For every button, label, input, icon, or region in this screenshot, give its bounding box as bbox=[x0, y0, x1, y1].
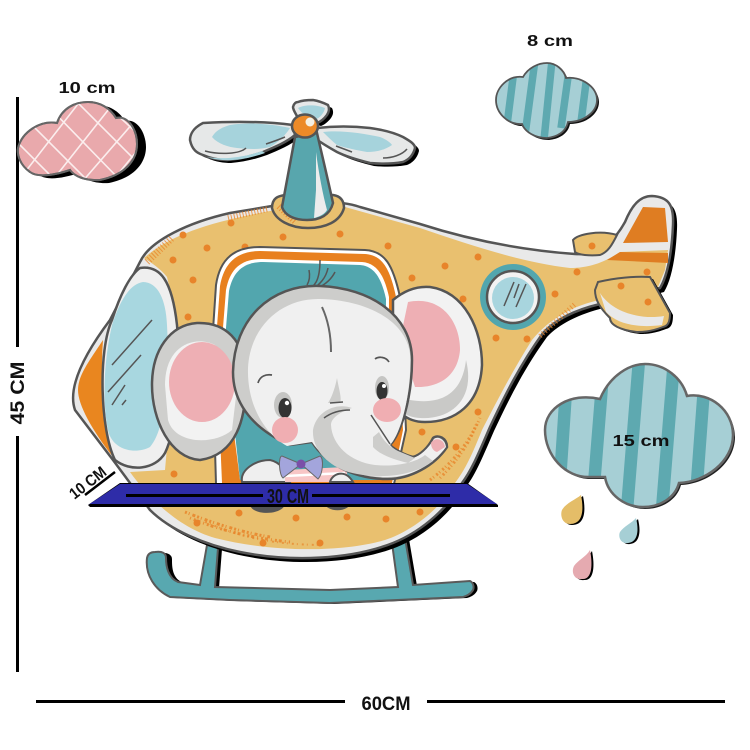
shelf dimension line: 30 CM: 30 CM bbox=[267, 486, 309, 508]
lower tail fin bbox=[595, 277, 673, 334]
forehead crease bbox=[322, 307, 331, 352]
blades bbox=[190, 100, 415, 164]
shelf depth dimension: 10 CM: 10 CM bbox=[66, 464, 110, 503]
cloud: teal 15 cm bbox=[545, 360, 735, 510]
upper tail fin bbox=[573, 233, 617, 255]
face bbox=[248, 299, 446, 477]
trunk lines bbox=[324, 402, 390, 444]
cloud: teal 8 cm bbox=[496, 33, 599, 140]
helicopter skids bbox=[147, 538, 478, 604]
bow tie bbox=[279, 456, 322, 479]
propeller shadow bbox=[194, 103, 419, 167]
label: 10 cm: 10 cm bbox=[58, 80, 116, 97]
dimension: width 60CM bbox=[36, 694, 725, 715]
collar bbox=[272, 195, 344, 228]
body outline bbox=[73, 196, 673, 558]
front windshield frame bbox=[103, 268, 179, 468]
right eye bbox=[375, 376, 389, 400]
orange speckle texture bbox=[147, 209, 575, 545]
trunk tip bbox=[431, 439, 445, 452]
raindrops bbox=[561, 495, 639, 580]
trunk shading bbox=[313, 406, 433, 476]
orange polka dots bbox=[170, 220, 652, 546]
hair tuft bbox=[305, 260, 335, 290]
side cabin window bbox=[212, 247, 406, 484]
cloud: pink 10 cm bbox=[16, 82, 146, 184]
yellow fuselage bbox=[130, 207, 668, 549]
body shadow bbox=[77, 200, 677, 562]
tail orange bbox=[607, 207, 668, 263]
paws and shirt bbox=[242, 460, 353, 482]
shelf dimension line: 30 CM bbox=[126, 486, 450, 508]
blue shelf bbox=[88, 483, 498, 508]
dimension: width 60CM: 60CM bbox=[362, 694, 410, 715]
left eye bbox=[274, 392, 292, 418]
elephant pilot bbox=[152, 260, 482, 513]
left ear bbox=[152, 323, 245, 460]
dimension: height 45 CM: 45 CM bbox=[8, 362, 29, 424]
porthole bbox=[480, 264, 546, 330]
feet under shelf bbox=[250, 505, 350, 513]
mast bbox=[282, 133, 333, 220]
cheeks bbox=[272, 417, 298, 443]
brows bbox=[258, 357, 389, 383]
dimension: height 45 CM bbox=[8, 97, 29, 672]
head bbox=[233, 286, 447, 479]
label: 15 cm: 15 cm bbox=[612, 433, 670, 450]
label: 8 cm: 8 cm bbox=[527, 33, 573, 50]
right ear bbox=[393, 287, 482, 422]
hub bbox=[292, 114, 318, 138]
propeller bbox=[190, 100, 419, 228]
blade lines bbox=[205, 137, 407, 158]
front windshield glass bbox=[105, 282, 168, 451]
helicopter body bbox=[73, 196, 677, 562]
nose orange panel bbox=[78, 340, 113, 457]
